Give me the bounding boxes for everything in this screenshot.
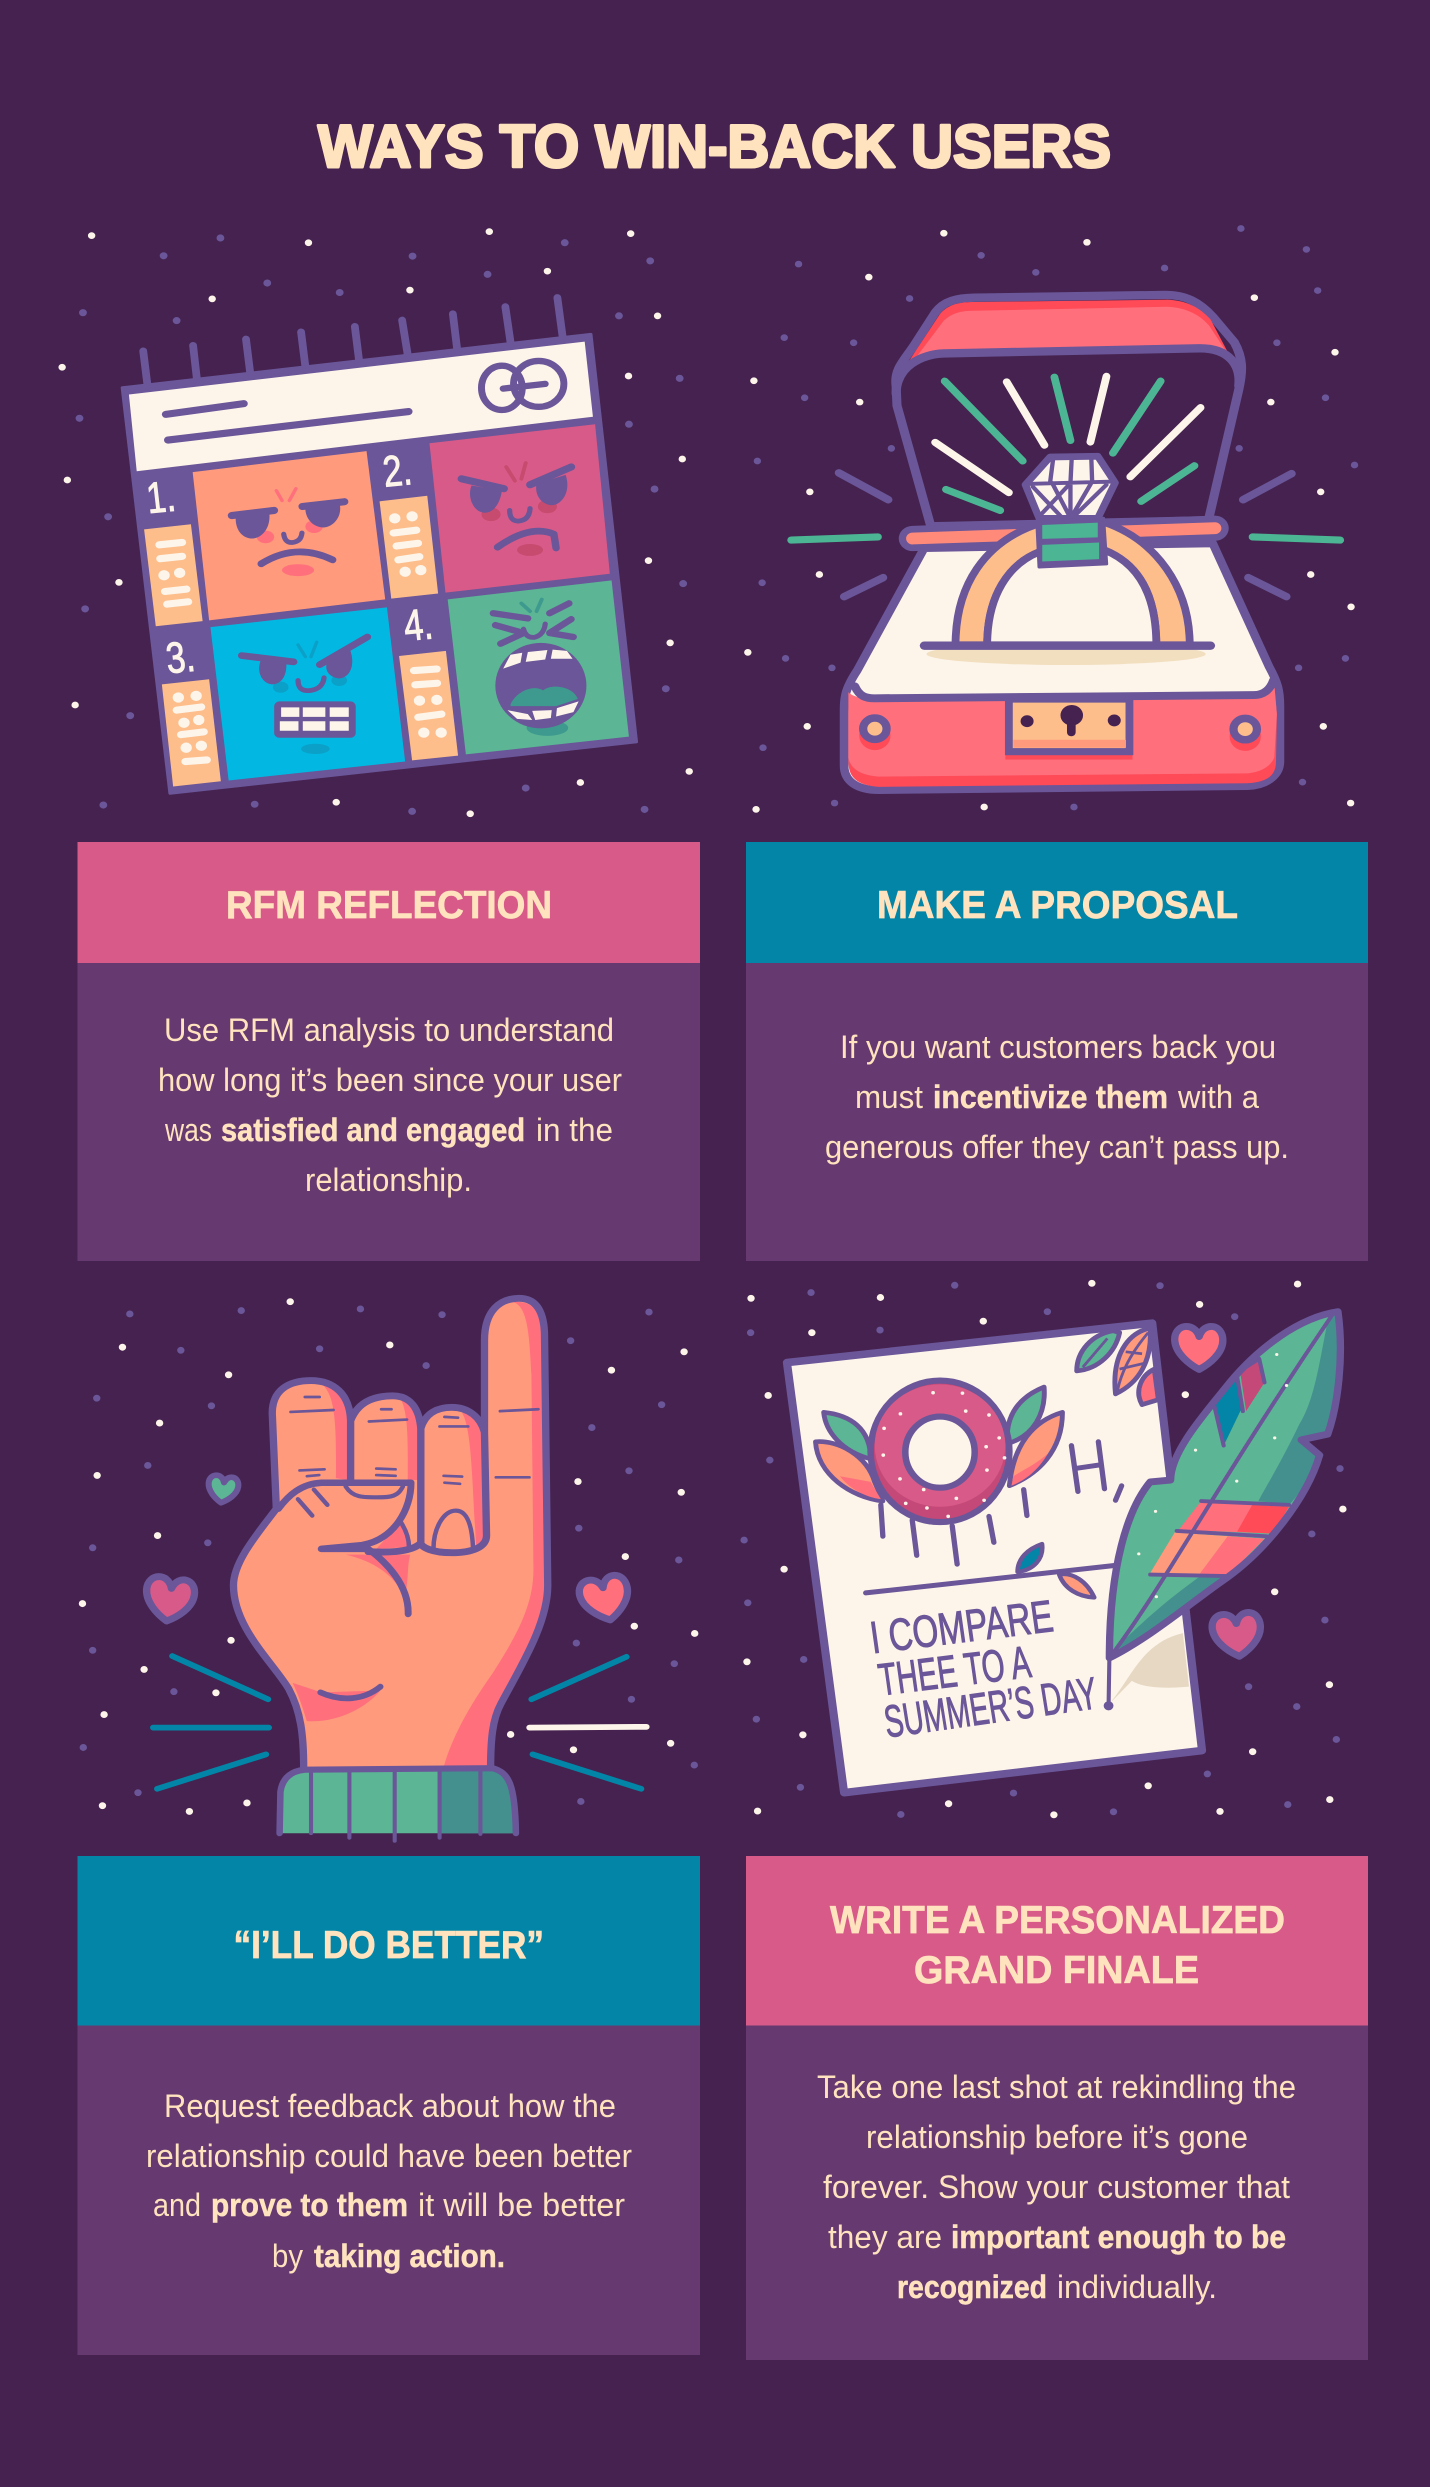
face 4 xyxy=(493,599,586,736)
hearts xyxy=(142,1474,633,1625)
title: WAYS TO WIN-BACK USERS xyxy=(318,113,1111,180)
panel: personalized grand finale: important enough to be xyxy=(951,2219,1286,2255)
hinge bar xyxy=(913,528,1215,539)
handwritten poem: THEE TO A xyxy=(875,1636,1034,1705)
panel: personalized grand finale: individually. xyxy=(1057,2269,1217,2305)
cuff xyxy=(280,1768,516,1841)
panel: personalized grand finale: recognized xyxy=(897,2269,1047,2305)
panel: RFM reflection: satisfied and engaged xyxy=(221,1112,525,1148)
panel: RFM reflection: was xyxy=(164,1112,212,1148)
panel: I'll do better: prove to them xyxy=(211,2187,408,2223)
face 1 xyxy=(232,489,344,576)
panel: I'll do better: and xyxy=(153,2187,201,2223)
calendar numbers xyxy=(144,446,435,683)
panel: RFM reflection: in the xyxy=(536,1112,613,1148)
panel: RFM reflection: Use RFM analysis to understand xyxy=(164,1012,614,1048)
panel: RFM reflection: how long it’s been since your user xyxy=(158,1062,622,1098)
hearts xyxy=(1175,1326,1263,1658)
panel: personalized grand finale xyxy=(746,1856,1368,2360)
divider with leaves xyxy=(866,1544,1116,1597)
calendar numbers: 2. xyxy=(380,446,414,497)
rays xyxy=(153,1656,647,1789)
illustration: ring box xyxy=(748,228,1355,809)
rays xyxy=(791,376,1340,597)
panel: make a proposal xyxy=(746,842,1368,1261)
illustration: love letter and feather xyxy=(744,1283,1343,1815)
donut with leaves xyxy=(816,1381,1062,1564)
panel: I'll do better: taking action. xyxy=(314,2238,505,2274)
face 2 xyxy=(462,463,571,556)
box lid xyxy=(896,295,1242,526)
illustration: angry calendar xyxy=(62,232,689,814)
face 3 xyxy=(242,637,367,754)
illustration: raised pinky hand xyxy=(82,1298,695,1841)
panel: make a proposal: incentivize them xyxy=(933,1079,1168,1115)
panel: RFM reflection: RFM REFLECTION xyxy=(226,884,552,927)
panel: personalized grand finale: Take one last shot at rekindling the xyxy=(817,2069,1296,2105)
panel: make a proposal: If you want customers back you xyxy=(840,1029,1276,1065)
calendar numbers: 4. xyxy=(401,601,435,651)
handwritten poem: SUMMER’S DAY xyxy=(881,1668,1100,1747)
paper shadow xyxy=(1109,1633,1189,1704)
panel: personalized grand finale: GRAND FINALE xyxy=(914,1949,1199,1992)
panel: personalized grand finale: WRITE A PERSONALIZED xyxy=(830,1899,1285,1942)
panel: personalized grand finale: forever. Show your customer that xyxy=(823,2169,1290,2205)
panel: personalized grand finale: they are xyxy=(828,2219,942,2255)
panel: I'll do better: relationship could have been better xyxy=(146,2138,632,2174)
paper xyxy=(787,1323,1202,1793)
hand xyxy=(233,1298,548,1769)
corner leaves xyxy=(1077,1328,1158,1405)
panel: I'll do better: it will be better xyxy=(418,2187,625,2223)
panel: make a proposal: MAKE A PROPOSAL xyxy=(877,884,1238,927)
panel: I'll do better: Request feedback about how the xyxy=(164,2088,616,2124)
panel: make a proposal: must xyxy=(855,1079,923,1115)
feather xyxy=(1104,1312,1340,1710)
panel: I'll do better: “I’LL DO BETTER” xyxy=(234,1924,544,1967)
handwritten H xyxy=(1071,1442,1122,1500)
diamond ring xyxy=(924,456,1211,646)
panel: I'll do better: by xyxy=(272,2238,303,2274)
calendar numbers: 3. xyxy=(164,633,198,683)
handwritten poem xyxy=(867,1591,1100,1747)
panel: make a proposal: generous offer they can’t pass up. xyxy=(825,1129,1289,1165)
calendar numbers: 1. xyxy=(144,473,178,523)
panel: RFM reflection: relationship. xyxy=(305,1162,472,1198)
box base xyxy=(844,543,1280,790)
panel: make a proposal: with a xyxy=(1177,1079,1259,1115)
panel: RFM reflection xyxy=(78,842,700,1261)
handwritten poem: I COMPARE xyxy=(867,1591,1056,1663)
panel: I'll do better xyxy=(78,1856,700,2355)
panel: personalized grand finale: relationship before it’s gone xyxy=(866,2119,1248,2155)
